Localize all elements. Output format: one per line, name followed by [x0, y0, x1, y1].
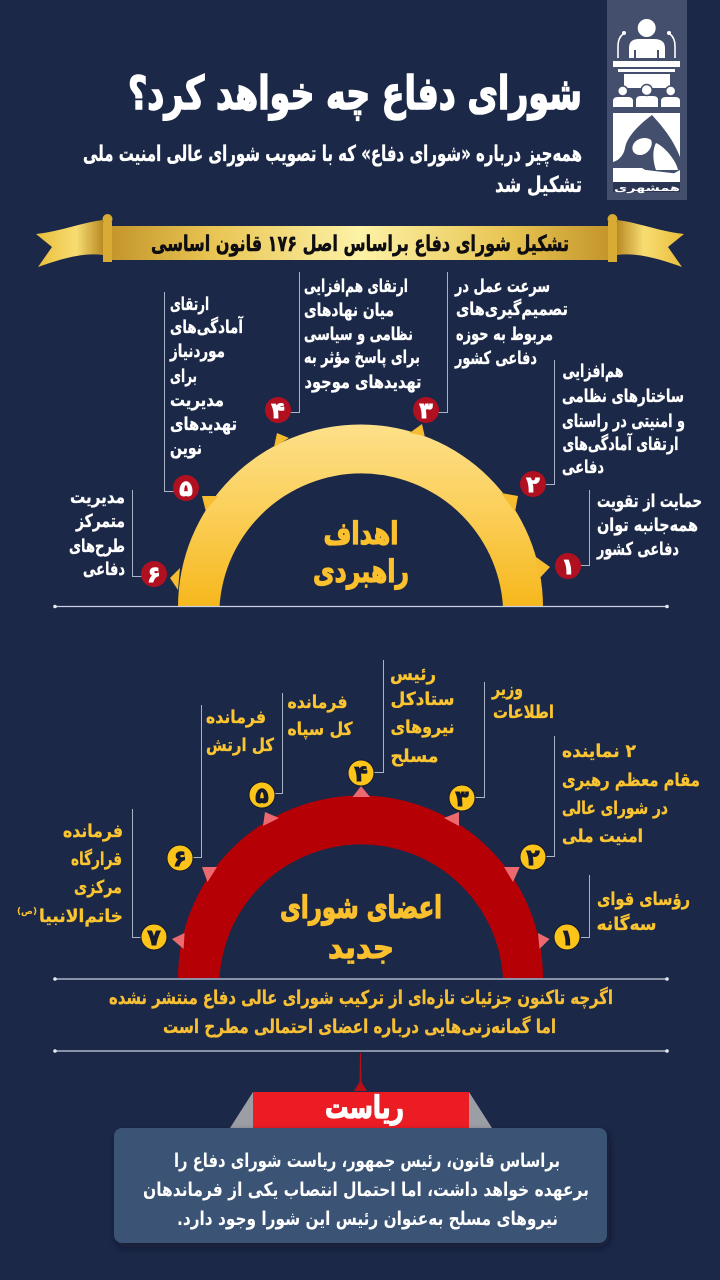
red heading tab: [253, 1092, 469, 1128]
goal 5 text: موردنیاز: [169, 341, 225, 362]
goal 5 text: مدیریت: [170, 390, 224, 411]
member 4 text: رئیس: [390, 664, 436, 685]
goal 4 text: نظامی و سیاسی: [304, 324, 413, 345]
goal 6 text: [69, 487, 125, 580]
goal 4 text: برای پاسخ مؤثر به: [304, 347, 420, 368]
goal 4 text: ارتقای هم‌افزایی: [304, 276, 408, 297]
presidency heading: ریاست: [325, 1090, 404, 1126]
goal 1 text: همه‌جانبه توان: [597, 515, 698, 536]
badge 6: ۶: [173, 847, 187, 872]
badge 6: [141, 561, 167, 588]
badge 2: ۲: [526, 473, 540, 498]
goal 2 text: دفاعی: [562, 457, 604, 478]
badge 3: [449, 785, 475, 812]
badge 5: [173, 475, 199, 502]
member 3 text: وزیر: [491, 679, 523, 700]
info box: [114, 1128, 607, 1243]
member 1 text: سه‌گانه: [596, 913, 656, 935]
member 2 text: در شورای عالی: [562, 798, 668, 819]
goal 5 text: نوین: [170, 438, 202, 459]
member 6 text: کل ارتش: [206, 735, 274, 756]
arch title: [280, 890, 442, 966]
goal 6 text: طرح‌های: [69, 536, 125, 557]
logo: Hamshahri 50 emblem: [607, 0, 687, 200]
goal 6 text: متمرکز: [75, 511, 125, 532]
grey side flaps: [230, 1092, 492, 1128]
member 4 text: مسلح: [390, 746, 438, 767]
member 1 text: [596, 889, 690, 935]
badge 5: [249, 782, 275, 809]
note text: اما گمانه‌زنی‌هایی درباره اعضای احتمالی مطرح است: [163, 1015, 556, 1038]
subtitle: تشکیل شد: [495, 173, 582, 198]
info box text: نیروهای مسلح به‌عنوان رئیس این شورا وجود دارد.: [177, 1208, 558, 1230]
goal 2 text: هم‌افزایی: [562, 361, 624, 382]
divider: [53, 1049, 669, 1053]
info box text: براساس قانون، رئیس جمهور، ریاست شورای دفاع را: [174, 1150, 560, 1172]
goal 6 text: مدیریت: [70, 487, 125, 508]
badge 2: [520, 471, 546, 498]
goal 4 text: تهدیدهای موجود: [304, 372, 422, 393]
arch title: [313, 516, 409, 590]
badge 3: ۳: [455, 787, 469, 812]
goal 3 text: مربوط به حوزه: [456, 324, 553, 345]
member 6 text: فرمانده: [206, 707, 266, 728]
goal 3 text: دفاعی کشور: [454, 348, 537, 369]
badge 1: [555, 553, 581, 580]
info box text: برعهده خواهد داشت، اما احتمال انتصاب یکی از فرماندهان: [143, 1179, 589, 1201]
member 7 text: خاتم‌الانبیا: [39, 906, 123, 927]
member 4 text: نیروهای: [390, 717, 454, 738]
member 2 text: [562, 741, 700, 847]
arch title: اهداف: [324, 516, 398, 552]
info box text: [143, 1150, 589, 1230]
badge 4: ۴: [354, 762, 368, 787]
gold ribbon banner: [36, 214, 684, 267]
arch title: جدید: [328, 930, 394, 966]
member 5 text: فرمانده: [288, 692, 348, 713]
badge 2: [520, 844, 546, 871]
goal 5 text: تهدیدهای: [170, 414, 237, 435]
badge 6: ۶: [147, 563, 161, 588]
logo: Hamshahri 50 emblem: همشهری: [614, 184, 680, 194]
arch title: راهبردی: [313, 554, 409, 590]
badge 1: [554, 924, 580, 951]
member 7 text: [17, 821, 123, 927]
goal 5 text: ارتقای: [170, 294, 209, 315]
member 2 text: امنیت ملی: [562, 826, 643, 847]
goal 4 text: میان نهادهای: [304, 300, 394, 321]
arch pointer triangles: [172, 786, 550, 949]
goal 3 text: تصمیم‌گیری‌های: [456, 298, 568, 320]
badge 3: ۳: [419, 399, 433, 424]
connector lines: [132, 660, 590, 938]
baseline: [53, 605, 669, 608]
goal 3 text: سرعت عمل در: [454, 276, 550, 297]
member 7 text: (ص): [17, 907, 37, 917]
badge 6: [167, 845, 193, 872]
goal 4 text: [304, 276, 422, 393]
member 2 text: ۲ نماینده: [562, 741, 636, 762]
gold arch: [178, 424, 543, 607]
badge 5: ۵: [255, 784, 269, 809]
badge 1: ۱: [560, 926, 574, 951]
goal 3 text: [454, 276, 568, 369]
member 7 text: قرارگاه: [71, 848, 122, 870]
banner heading: تشکیل شورای دفاع براساس اصل ۱۷۶ قانون اساسی: [151, 232, 569, 257]
goal 1 text: [596, 491, 702, 560]
baseline: [53, 977, 669, 981]
member 4 text: ستادکل: [390, 689, 454, 710]
badge 5: ۵: [179, 477, 193, 502]
member 1 text: رؤسای قوای: [597, 889, 690, 910]
note text: [109, 986, 613, 1038]
member 3 text: [491, 679, 554, 723]
subtitle: [83, 142, 582, 198]
member 4 text: [390, 664, 454, 767]
goal 5 text: آمادگی‌های: [170, 315, 244, 338]
arch pointer triangles: [170, 424, 550, 590]
badge 7: [141, 924, 167, 951]
member 7 text: فرمانده: [63, 821, 123, 842]
badge 4: ۴: [271, 399, 285, 424]
member 7 text: مرکزی: [74, 877, 122, 898]
badge 2: ۲: [526, 846, 540, 871]
goal 6 text: دفاعی: [83, 559, 125, 580]
goal 2 text: [562, 361, 685, 478]
connector to presidency: [354, 1053, 367, 1091]
goal 1 text: دفاعی کشور: [596, 539, 679, 560]
goal 5 text: [169, 294, 244, 459]
member 3 text: اطلاعات: [493, 702, 554, 723]
panel: presidency: [114, 1090, 607, 1243]
badge 4: [348, 760, 374, 787]
member 5 text: [288, 692, 353, 740]
arch title: اعضای شورای: [280, 890, 442, 926]
member 5 text: کل سپاه: [288, 719, 353, 740]
badge 4: [265, 397, 291, 424]
badge 7: ۷: [147, 926, 161, 951]
panel: strategic goals: [53, 272, 702, 608]
connector lines: [132, 272, 590, 576]
red arch: [178, 796, 543, 978]
panel: new council members: [17, 660, 700, 981]
goal 5 text: برای: [170, 366, 197, 387]
badge 1: ۱: [561, 555, 575, 580]
badge 3: [413, 397, 439, 424]
member 6 text: [206, 707, 274, 756]
